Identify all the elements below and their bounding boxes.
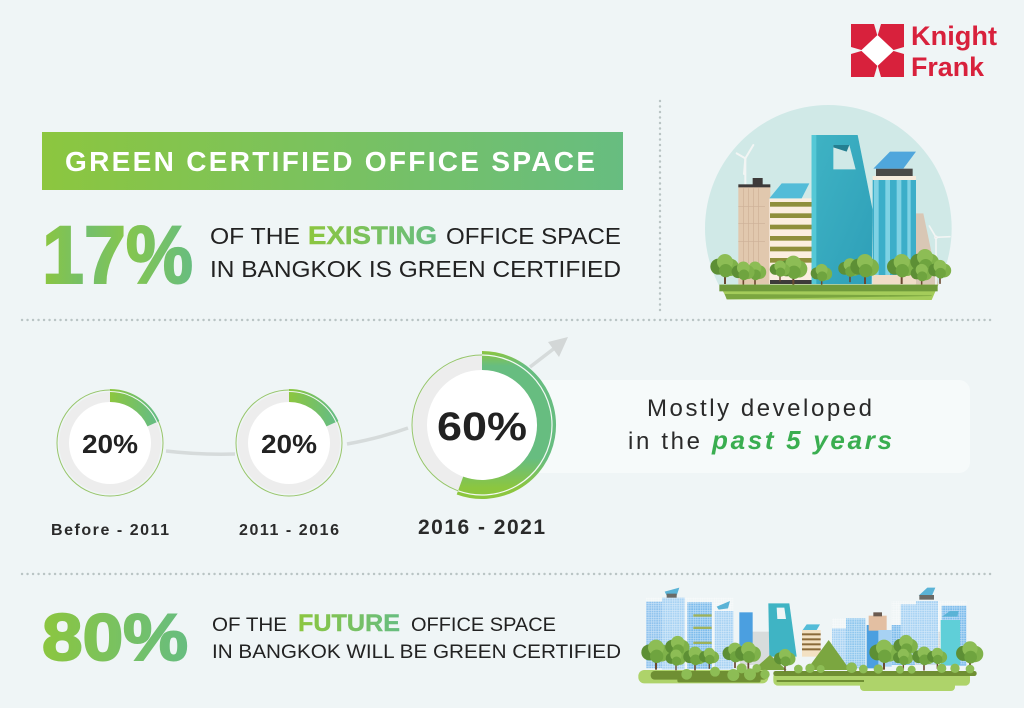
arrow head <box>548 337 568 357</box>
text: existing office space <box>210 222 621 282</box>
period labels: 2011 - 2016 <box>239 522 339 539</box>
hills <box>753 655 787 670</box>
donut: before 2011: 20% <box>82 429 138 459</box>
background buildings <box>646 588 966 669</box>
callout <box>530 380 970 473</box>
illustration: green buildings <box>705 105 952 300</box>
period labels <box>51 516 545 539</box>
ground <box>638 670 768 683</box>
callout text: in the <box>628 428 700 455</box>
period labels: 2016 - 2021 <box>418 516 545 539</box>
callout text: past 5 years <box>711 425 892 455</box>
donut: before 2011 <box>57 390 163 496</box>
text: future office space: OFFICE SPACE <box>411 614 556 636</box>
title text: GREEN CERTIFIED OFFICE SPACE <box>65 146 595 177</box>
logo mark <box>851 24 904 77</box>
chart: growth connectors <box>166 347 556 454</box>
callout text <box>628 395 892 455</box>
stat: 17%: 17% <box>42 210 193 301</box>
illustration: future green city <box>638 588 983 691</box>
text: future office space: FUTURE <box>298 610 400 637</box>
logo wordmark <box>911 21 997 82</box>
wind turbine left <box>737 145 753 184</box>
text: existing office space: OF THE <box>210 223 300 249</box>
wind turbine right <box>929 226 950 285</box>
text: future office space: IN BANGKOK WILL BE GREEN CERTIFIED <box>212 641 621 663</box>
text: future office space <box>212 610 621 663</box>
trees <box>641 640 670 670</box>
shrubs <box>681 662 974 681</box>
donut: 2016-2021: 60% <box>437 405 527 449</box>
logo: Knight Frank <box>851 21 997 82</box>
trees <box>710 254 739 284</box>
donut: 2016-2021 <box>412 355 552 495</box>
donut: 2011-2016: 20% <box>261 429 317 459</box>
logo wordmark: Knight <box>911 21 997 51</box>
text: existing office space: OFFICE SPACE <box>446 223 621 249</box>
text: existing office space: IN BANGKOK IS GREEN CERTIFIED <box>210 256 621 282</box>
text: existing office space: EXISTING <box>308 222 437 250</box>
stat: 80%: 80% <box>42 600 188 674</box>
period labels: Before - 2011 <box>51 522 169 539</box>
callout text: Mostly developed <box>647 395 872 422</box>
title banner <box>42 132 623 190</box>
logo wordmark: Frank <box>911 52 985 82</box>
section dividers <box>22 101 991 574</box>
text: future office space: OF THE <box>212 614 287 636</box>
donut: 2011-2016 <box>236 390 342 496</box>
